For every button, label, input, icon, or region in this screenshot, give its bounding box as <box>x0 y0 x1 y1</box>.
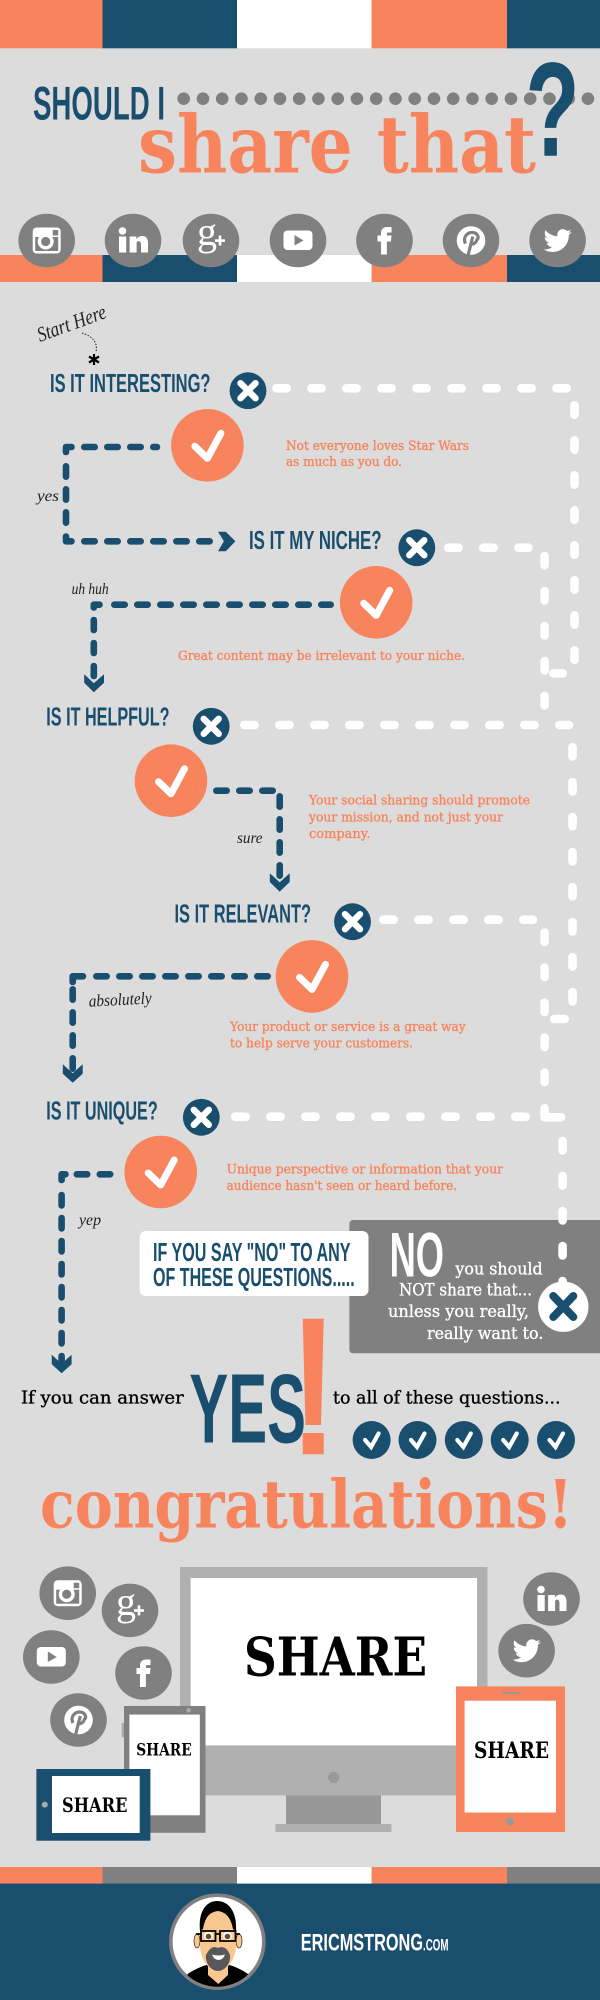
icon: pinterest <box>443 214 499 267</box>
no-path dashed white connectors <box>235 388 575 1117</box>
question 5: unique: Unique perspective or information that your <box>227 1162 504 1177</box>
icon: linkedin <box>105 214 161 267</box>
panel: if you say no callout <box>140 1231 368 1296</box>
question 1: interesting: as much as you do. <box>286 455 402 470</box>
title: should I share that?: SHOULD I <box>33 76 165 129</box>
avatar <box>171 1895 264 1990</box>
five check marks <box>353 1421 575 1459</box>
question 3: helpful: IS IT HELPFUL? <box>46 704 169 732</box>
icon: google plus <box>102 1579 158 1637</box>
uh huh arrow: uh huh <box>72 581 109 598</box>
yes arrow <box>35 447 235 551</box>
absolutely arrow: absolutely <box>88 988 153 1011</box>
yes arrow: yes <box>35 488 59 505</box>
sure arrow: sure <box>237 830 262 847</box>
panel: no, you should not share: NOT share that... <box>399 1281 532 1301</box>
coral tablet <box>456 1686 565 1832</box>
panel: no, you should not share <box>349 1141 600 1353</box>
start here note: Start Here <box>34 300 109 347</box>
question 4: relevant: IS IT RELEVANT? <box>174 901 311 929</box>
footer <box>0 1884 600 2000</box>
panel: if you say no callout: IF YOU SAY "NO" TO ANY <box>153 1239 350 1267</box>
yep arrow: yep <box>77 1212 101 1229</box>
icon: big x <box>538 1282 588 1332</box>
desktop monitor: SHARE <box>244 1626 427 1689</box>
desktop monitor <box>180 1567 488 1832</box>
panel: no, you should not share: really want to. <box>427 1324 543 1344</box>
footer: ERICMSTRONG <box>301 1930 423 1957</box>
panel: if you say no callout: OF THESE QUESTIONS..... <box>153 1264 355 1292</box>
icon: twitter <box>529 214 586 267</box>
icon: instagram <box>18 214 75 267</box>
question 3: helpful: your mission, and not just your <box>308 810 504 825</box>
icon: facebook <box>115 1646 172 1700</box>
question 1: interesting: Not everyone loves Star Wars <box>286 439 469 454</box>
icon: youtube <box>23 1630 80 1684</box>
question 4: relevant: to help serve your customers. <box>230 1037 413 1052</box>
phone <box>122 1706 206 1833</box>
question 1: interesting <box>50 370 469 482</box>
question 2: niche: IS IT MY NICHE? <box>249 527 382 555</box>
question 4: relevant <box>174 901 466 1052</box>
title: should I share that?: share that <box>138 98 536 192</box>
icon: twitter <box>498 1624 555 1678</box>
yep arrow <box>52 1174 110 1373</box>
question 4: relevant: Your product or service is a great way <box>229 1020 466 1035</box>
sure arrow <box>216 791 290 892</box>
question 5: unique <box>46 1098 504 1208</box>
navy tablet <box>36 1769 150 1841</box>
uh huh arrow <box>72 581 331 692</box>
panel: no, you should not share: unless you really, <box>388 1302 529 1322</box>
second colour band <box>0 255 600 282</box>
icon: google plus <box>183 209 239 267</box>
social icon cluster <box>23 1566 580 1747</box>
top colour band <box>0 0 600 48</box>
yes statement: If you can answer <box>21 1387 184 1408</box>
question 1: interesting: IS IT INTERESTING? <box>50 370 210 398</box>
footer: .COM <box>423 1937 448 1955</box>
start here note <box>34 300 109 365</box>
coral tablet: SHARE <box>474 1738 549 1764</box>
bottom colour band <box>0 1867 600 1884</box>
question 3: helpful: Your social sharing should promote <box>308 793 530 808</box>
absolutely arrow <box>63 976 268 1083</box>
yes statement: YES <box>189 1354 306 1464</box>
question 2: niche: Great content may be irrelevant to your niche. <box>178 649 465 664</box>
question 3: helpful <box>46 704 530 842</box>
icon: linkedin <box>523 1572 580 1626</box>
yes statement <box>21 1319 561 1464</box>
question 2: niche <box>178 527 465 664</box>
icon: instagram <box>39 1566 96 1620</box>
icon: youtube <box>270 214 326 267</box>
social icon row <box>18 209 586 267</box>
panel: no, you should not share: NO <box>390 1221 444 1291</box>
icon: pinterest <box>50 1693 107 1747</box>
icon: facebook <box>356 214 413 267</box>
navy tablet: SHARE <box>62 1794 128 1817</box>
phone: SHARE <box>136 1740 192 1760</box>
panel: no, you should not share: you should <box>454 1259 543 1279</box>
yes statement: to all of these questions... <box>333 1387 561 1408</box>
question 5: unique: audience hasn't seen or heard before. <box>227 1179 457 1194</box>
question 3: helpful: company. <box>309 827 370 842</box>
title: should I share that? <box>33 36 590 192</box>
question 5: unique: IS IT UNIQUE? <box>46 1098 158 1126</box>
